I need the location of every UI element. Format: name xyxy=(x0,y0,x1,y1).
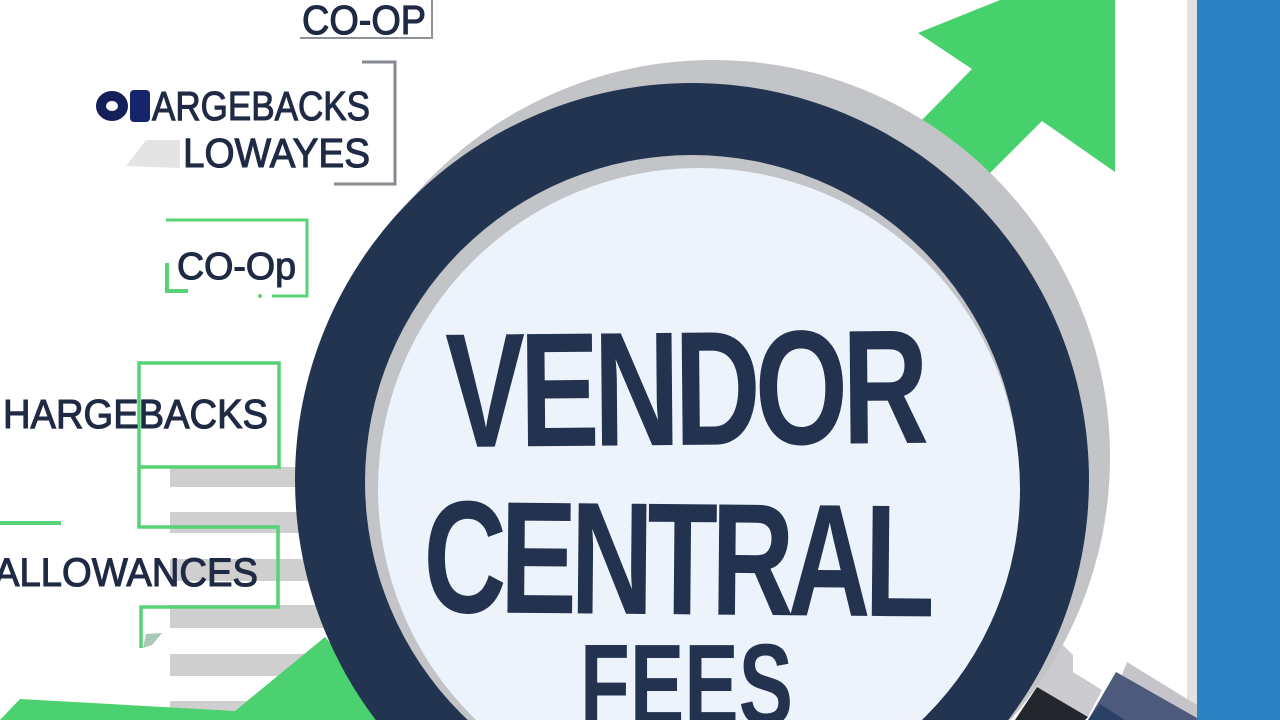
label box: co-op green xyxy=(166,220,307,298)
chart: grey background bars xyxy=(170,467,370,720)
panel: blue side band xyxy=(1187,0,1280,720)
label box: chargebacks and allowances grey: LOWAYES xyxy=(183,130,370,176)
title: vendor central fees xyxy=(423,297,932,720)
label box: chargebacks and allowances green xyxy=(0,363,279,648)
icon: garbled letter blobs xyxy=(101,90,180,168)
label box: chargebacks and allowances green: ALLOWANCES xyxy=(0,551,258,595)
label box: chargebacks and allowances grey: ARGEBACKS xyxy=(152,83,370,129)
arrow: green rising trend head xyxy=(918,0,1115,178)
label box: co-op green: CO-Op xyxy=(177,246,296,288)
label box: chargebacks and allowances grey xyxy=(101,62,395,184)
title: vendor central fees: VENDOR xyxy=(445,297,927,482)
label box: chargebacks and allowances green: HARGEBACKS xyxy=(3,391,268,437)
icon: magnifying glass handle xyxy=(1015,640,1197,720)
icon: magnifying glass lens xyxy=(295,60,1110,720)
arrow: green rising trend lower part xyxy=(0,637,400,720)
title: vendor central fees: CENTRAL xyxy=(423,467,932,651)
